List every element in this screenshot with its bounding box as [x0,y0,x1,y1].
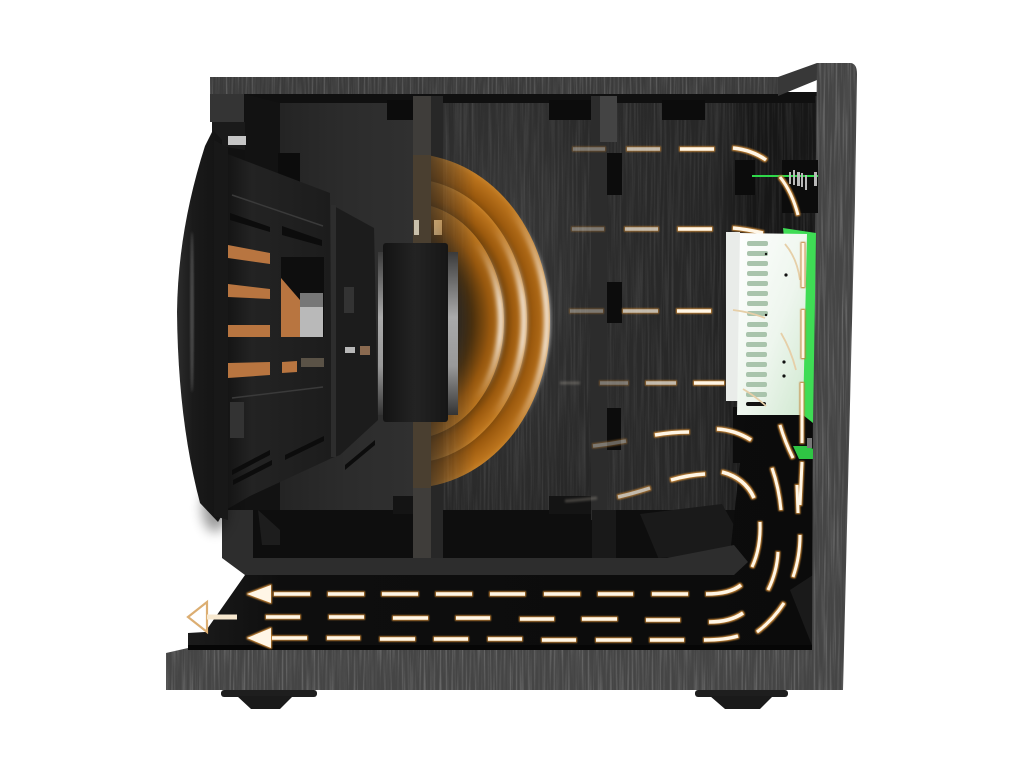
middle wave [431,182,527,460]
mid-faded airflow dashes [618,149,676,497]
outlet arrow [188,602,237,632]
rear basket section [332,205,378,458]
cabinet top panel [210,77,778,94]
cabinet left top block [210,94,244,122]
copper windows [228,245,297,378]
basket front ring [214,140,228,520]
cabinet top-right slanted edge [778,63,817,96]
small green board at bottom right [793,438,813,459]
cabinet L-shaped right and bottom panel [166,63,857,690]
airflow dashes along port: bottom row [247,628,738,648]
foot: right [695,690,788,709]
faint airflow dashes [560,383,597,501]
mounting hardware [212,122,246,150]
foot: left [221,690,317,709]
basket ribs [232,195,323,398]
amplifier module [726,228,816,423]
rear basket small windows [345,346,370,355]
dividers [413,96,617,562]
infographic: subwoofer cabinet cross-section [166,63,857,709]
magnet [383,243,448,422]
outer wave [431,156,550,486]
airflow dashes along port: middle row [266,613,743,622]
airflow dashes in the main chamber [655,148,766,498]
rear basket edge [331,205,336,457]
airflow dashes along port: top row [247,585,741,603]
speaker driver [177,122,458,522]
speaker drop shadow [202,484,228,532]
inner wave [436,208,504,434]
port channel [188,415,813,652]
large cone window [281,257,324,367]
back wall of the cabinet [225,92,820,525]
front baffle and port shelf [222,510,748,575]
floor of the upper chamber [253,496,753,562]
surround and frame [177,130,222,522]
motor rings [378,252,458,415]
basket panels [230,287,354,438]
sound waves from the motor [431,156,554,486]
small circuit board at top right [752,160,818,213]
surround highlight [190,232,194,392]
brace blocks [278,100,755,463]
basket slots [230,213,375,485]
faded airflow dashes on the left [570,149,628,446]
basket [217,150,332,515]
airflow dashes around the port bend [752,177,803,632]
